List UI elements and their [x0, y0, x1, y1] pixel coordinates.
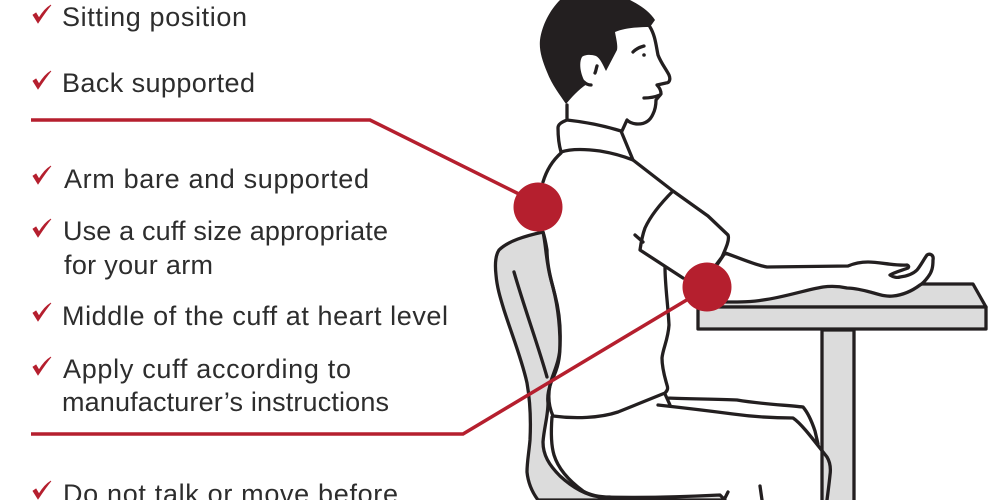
text: Apply cuff according to — [63, 354, 351, 384]
pointer line: shoulder — [31, 120, 525, 197]
forearm and hand — [700, 253, 933, 302]
checklist: arm and cuff — [33, 164, 448, 417]
table front edge — [698, 307, 986, 329]
check — [33, 219, 51, 237]
face — [622, 27, 670, 131]
table — [697, 284, 986, 500]
marker: elbow — [682, 262, 732, 312]
text: Middle of the cuff at heart level — [62, 301, 448, 331]
sleeve — [633, 160, 728, 278]
checklist: position — [33, 2, 255, 98]
eyebrow, eye and mouth — [584, 46, 660, 98]
checklist: before measuring — [33, 479, 398, 500]
chair — [495, 232, 762, 500]
marker: shoulder — [514, 182, 562, 232]
check — [33, 357, 51, 375]
check — [33, 303, 51, 321]
table top — [697, 284, 986, 307]
person — [540, 0, 933, 500]
check — [33, 71, 51, 89]
pointer line: elbow — [31, 298, 690, 434]
check — [33, 5, 51, 23]
table leg — [822, 330, 854, 500]
chair seat base — [724, 486, 762, 500]
text: Arm bare and supported — [64, 164, 369, 194]
check — [33, 166, 51, 184]
text: manufacturer’s instructions — [62, 387, 389, 417]
text: for your arm — [64, 250, 213, 280]
text: Use a cuff size appropriate — [63, 216, 388, 246]
thigh — [658, 394, 830, 500]
chair back inner line — [514, 272, 547, 377]
chair seat inner line — [551, 417, 610, 497]
text: Sitting position — [62, 2, 247, 32]
collar — [558, 105, 633, 160]
text: Back supported — [62, 68, 255, 98]
shirt — [543, 153, 669, 418]
hair — [540, 0, 655, 104]
check — [33, 481, 51, 499]
